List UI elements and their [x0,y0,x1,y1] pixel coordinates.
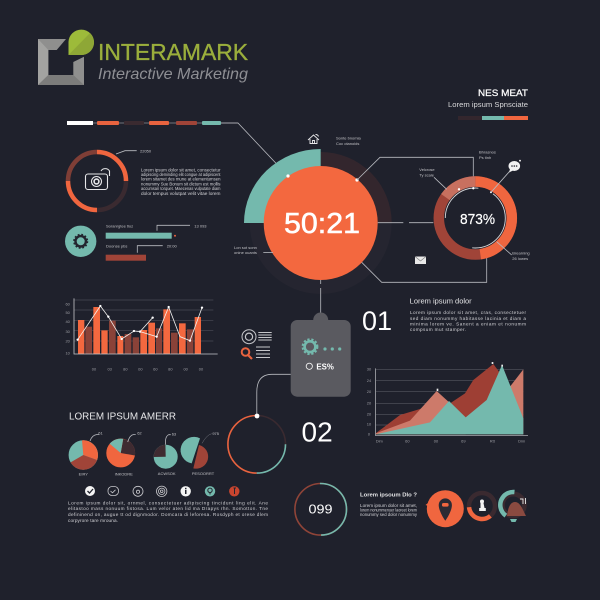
paragraph: bottom left: corpyrore tare mrouna. [68,518,118,523]
note: ring top: Bhrasnos [479,150,496,154]
number 02: 02 [302,417,333,448]
bar: red [106,244,177,261]
area chart: Rtt [490,438,496,443]
bar chart: 80 [123,367,128,372]
pie 3: 63 [172,432,177,437]
note: left of dial: Lon sot sonn [234,245,257,250]
note: ring upper left: Velcrose [419,167,435,172]
icon: info [180,486,191,496]
tag label: ES% [316,362,334,372]
text block 01: compsum mut stamper. [410,327,466,332]
logo name: INTERAMARK [98,39,248,65]
logo [38,30,248,85]
area chart: 24 [367,378,372,383]
icon: chat bubble [491,160,521,192]
connector: dial to tag [320,288,322,314]
note: ring top: Ps tinh [479,155,491,160]
bar: teal: Soranrgtee tloz [106,224,133,229]
pie 3: ACWSOK [158,471,176,476]
icon: gear [303,339,317,354]
ring value: 873% [460,212,495,228]
dial value: 50:21 [284,208,360,240]
bar chart: 00 [92,367,97,372]
logo mark: square frame [38,39,84,85]
note: left of dial [234,245,273,255]
icon: location pin badge [426,490,464,527]
bar chart: 03 [107,367,113,372]
bar chart: 50 [65,310,71,315]
right percentage ring [424,167,526,269]
text block 01: Lorem ipsum dolor sit amet, cras, consectetuer [410,310,526,315]
heading colour bar [458,116,528,120]
icon: envelope [415,256,426,264]
icon: magnifier with list [242,347,270,359]
connector from strip to dial [221,123,288,176]
pie 3 [158,432,177,476]
ring 02 [228,414,286,473]
icon: spiral target [156,486,167,496]
gear badge and bars [65,224,207,261]
bar chart: 80 [168,367,173,372]
area chart: Dim [518,438,526,443]
note: ring upper left: Ty scale [419,172,435,178]
bar chart: 00 [183,367,189,372]
note: ring lower right: Brearning [512,250,530,256]
area chart: 69 [461,438,466,443]
note: ring lower right: 26 lowes [512,256,528,261]
pie charts [74,430,220,476]
bar: red: 20:00 [167,244,177,249]
area chart: 20 [367,401,372,406]
bar chart: 40 [65,319,71,324]
pie 4: 975 [212,431,220,436]
icon: teal ring with bell [495,487,531,523]
heading: pies: LOREM IPSUM AMERR [69,411,176,422]
icon: camera [86,169,110,190]
paragraph: bottom left [68,500,268,523]
icon: check [85,486,95,496]
area chart: 0 [368,431,371,436]
bar chart: 60 [65,301,71,306]
paragraph: bottom left: Lorem ipsum dolor sit, ornmel, consectetuer adipiscing tincidunt ling elit. Ane [68,500,268,506]
text block: bottom [360,493,418,517]
area chart [367,362,528,443]
heading: top right [448,88,528,120]
number 01: 01 [362,306,392,336]
note: top of dial: Coc otanoids [336,141,359,146]
heading: top right: NES MEAT [478,88,528,99]
text block 01: minima lorem ve. Sanent a eniam et nonumm [410,322,526,326]
top left dashed progress strip [67,121,238,125]
bar: teal [106,224,207,239]
area chart: 20 [367,389,372,394]
paragraph: top left: lorem sitamet des mune at elementumsen [141,177,221,182]
pie 2 [111,430,142,476]
bar chart: 30 [65,329,71,334]
note: ring upper left [419,167,447,189]
icon row [85,486,240,496]
text block 01: Lorem ipsum dolor [410,296,472,306]
connector: tag to ring [257,374,291,416]
bar chart: 20 [65,338,71,343]
pie 4 [181,431,220,476]
icon: red badge [229,486,240,496]
logo mark: leaf [68,30,94,55]
area chart: Dim [376,438,384,443]
icon: gear badge [65,226,96,257]
icon: outlined coin [133,486,143,496]
pie 1: EIRY [79,472,88,476]
pie 1: 61 [98,430,104,436]
paragraph: top left: accumsan torquet. Maecenas vulputate diam [141,186,221,191]
note: top of dial [336,136,361,146]
icon: pawn ring [464,488,500,524]
central dial [244,149,392,294]
text block: bottom: Lorem ipsum dolor sit amet, [360,503,417,508]
paragraph: top left: Lorem ipsum dolor sit amet, consectetur [141,168,221,172]
paragraph: top left: adipiscing deminding elit congue at adipiscent [141,172,221,177]
icon: outlined check [108,486,118,496]
bar: red: Doonse pbs [106,244,127,249]
pie 1 [74,430,104,476]
tag card [291,312,351,397]
bar chart: 00 [199,367,204,372]
area chart: 20 [367,412,372,417]
connectors dial to ring [321,157,487,284]
paragraph: bottom left: defininend on, augue tt od dignmodor. Domcara di leforesa. Rosdyph et orese dlem [68,512,268,517]
bar chart [65,298,218,372]
heading: top right: Lorem ipsum Spnsciate [448,100,528,109]
text block: bottom: lorem nonummenuer laoreet lorem [360,508,417,512]
bar chart: 60 [153,367,158,372]
pie 2: 62 [137,430,142,436]
progress dots [323,347,341,351]
note: left of dial: onine ouants [234,250,257,255]
area chart: 00 [434,438,439,443]
bar: teal: 13 093 [194,224,207,229]
text block 01 [410,296,526,332]
camera ring [68,148,152,210]
text block: bottom: nonummy sed dolor nonummy [360,512,418,517]
ring value: 099 [308,502,333,516]
area chart: 10 [367,422,372,427]
note: ring top [479,150,496,160]
ring leader and value: 22050 [140,148,152,153]
bar chart: 10 [65,351,71,356]
text block 01: sed diam nonummy habitasse lacinia et diam a [410,316,526,321]
logo tagline: Interactive Marketing [98,66,248,83]
note: ring lower right [497,242,530,261]
icon: target with list [242,330,272,344]
area chart: 60 [405,438,410,443]
note: top of dial: Sonte bnomia [336,136,361,140]
bar chart: 00 [138,367,143,372]
icon: home [308,134,319,144]
paragraph: top left: nonummy Sue Bonum sit dictum est mollis [141,181,221,186]
pie 4: PESOORRT [192,471,215,476]
paragraph: top left: dolor tempus volutpat velit vitae lorem [141,191,221,196]
paragraph: bottom left: elitastoo mass nonuum fistosa. Lum velor aten lid ma Drapys rhn. Somotton. Tne [68,506,268,511]
bottom ring [295,483,347,535]
paragraph: top left [141,168,221,196]
text block: bottom: Lorem ipsoum Dlo ? [360,493,417,499]
icon: teal pin [205,486,215,496]
area chart: 30 [367,367,372,372]
pie 2: INKODRE [115,472,133,476]
